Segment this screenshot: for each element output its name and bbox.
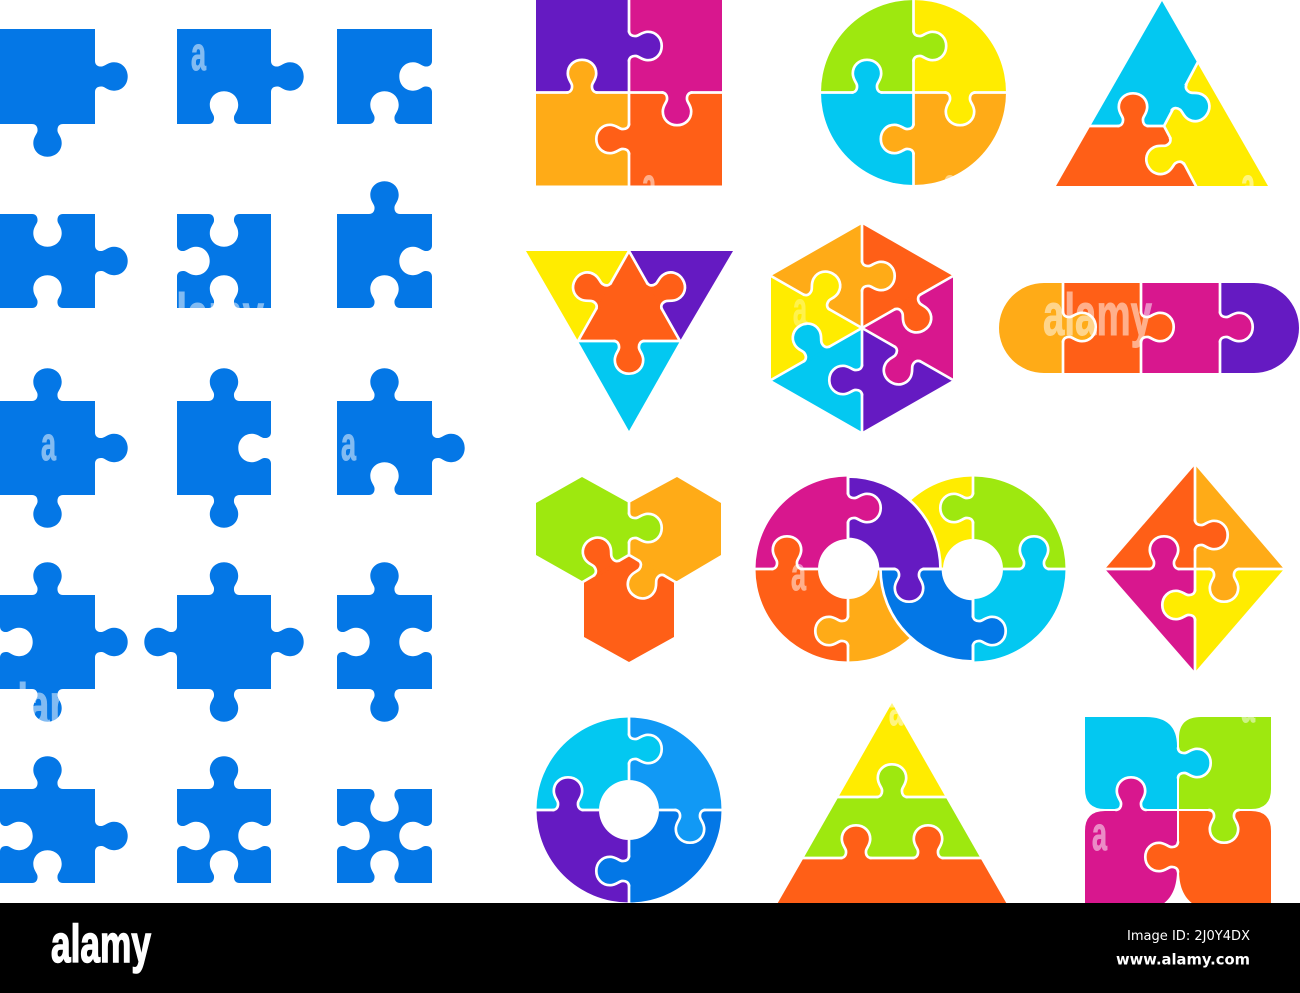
footer logo: alamy (51, 915, 151, 974)
watermarks: alamy (1043, 282, 1152, 348)
watermarks: a (1241, 158, 1255, 211)
piece row 1 column 1 (0, 29, 128, 157)
puzzle triangle (1056, 1, 1268, 188)
puzzle ring (536, 717, 722, 903)
piece row 1 column 3 (337, 29, 433, 125)
watermarks: a (791, 547, 806, 600)
watermarks: a (1092, 807, 1107, 860)
piece row 1 column 2 (177, 29, 304, 125)
watermarks: a (943, 158, 957, 211)
piece row 3 column 1 (0, 368, 128, 528)
piece row 5 column 1 (0, 756, 128, 884)
puzzle square (536, 0, 722, 186)
footer bar (0, 903, 1300, 993)
footer website: www.alamy.com (1116, 950, 1250, 968)
watermarks: a (1241, 679, 1255, 732)
piece row 4 column 1 (0, 562, 128, 722)
puzzle hexagon (771, 224, 953, 432)
watermarks: a (793, 282, 807, 335)
piece row 3 column 2 (177, 368, 272, 528)
puzzle circle (821, 0, 1006, 185)
piece row 3 column 3 (337, 368, 465, 496)
watermarks: a (889, 682, 903, 735)
watermarks: a (642, 158, 656, 211)
piece row 2 column 2 (176, 213, 271, 309)
puzzle three hexagons (536, 477, 721, 662)
footer image id: Image ID: 2J0Y4DX (1127, 928, 1250, 944)
piece row 4 column 2 (144, 562, 304, 722)
panel: blue puzzle pieces (0, 29, 465, 884)
watermarks: alamy (0, 672, 105, 738)
puzzle rounded square (1085, 717, 1271, 906)
watermarks: a (191, 27, 206, 80)
watermarks: a (341, 417, 356, 470)
watermarks: a (41, 417, 56, 470)
puzzle inverted triangle (526, 249, 733, 431)
puzzle pyramid (772, 703, 1012, 913)
piece row 2 column 3 (337, 181, 433, 309)
piece row 2 column 1 (0, 213, 128, 309)
piece row 5 column 2 (176, 756, 272, 884)
puzzle diamond (1103, 462, 1286, 675)
piece row 5 column 3 (336, 788, 433, 884)
piece row 4 column 3 (336, 562, 433, 722)
watermarks: alamy (155, 282, 264, 348)
puzzle pill (999, 282, 1299, 374)
puzzle infinity (755, 476, 1066, 662)
